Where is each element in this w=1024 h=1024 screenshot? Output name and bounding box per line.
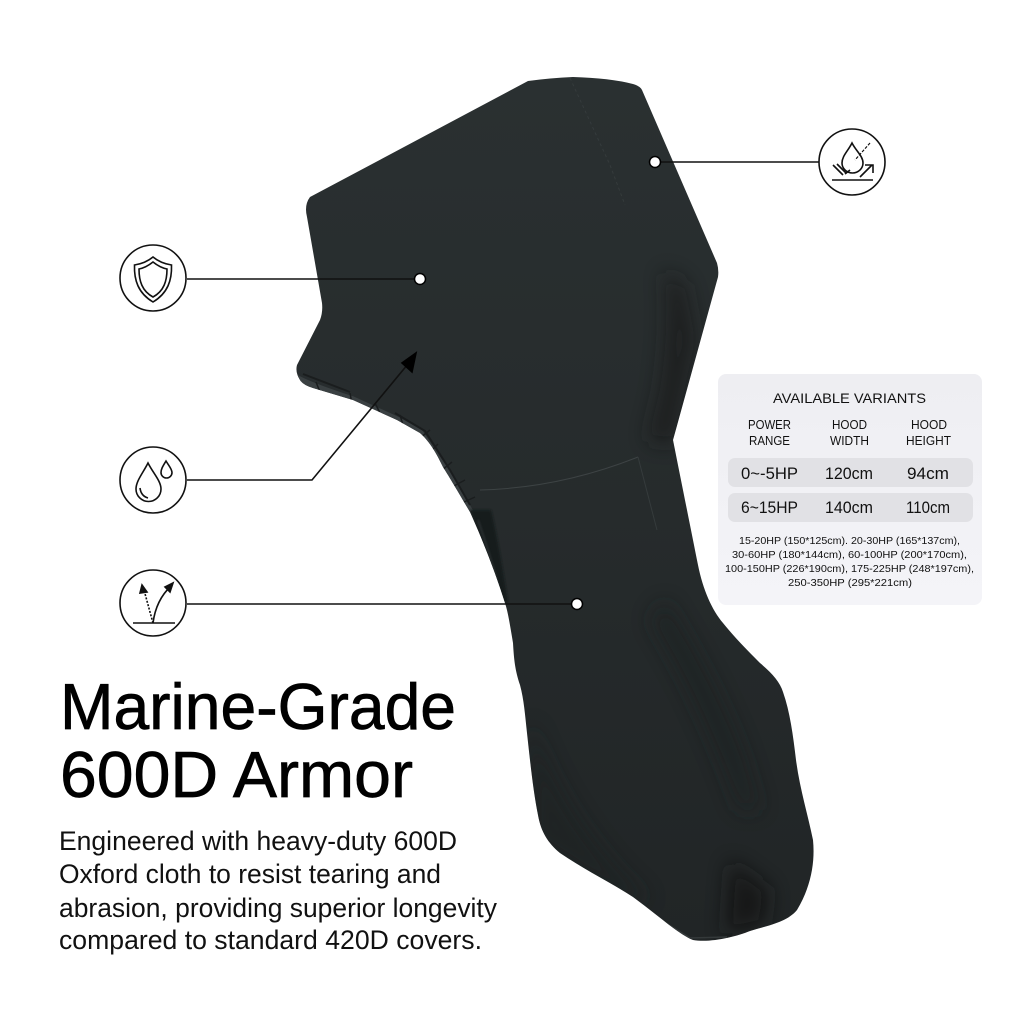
table row: 0-5HP: 0~-5HP [741, 465, 798, 483]
callout: shield [120, 245, 426, 311]
panel: available variants [718, 374, 982, 605]
callout: abrasion deflection [120, 570, 582, 636]
additional sizes note: 15-20HP (150*125cm). 20-30HP (165*137cm), [739, 535, 960, 547]
table row: 6-15HP [728, 493, 973, 522]
table column headers: HEIGHT [906, 434, 951, 448]
description text: Oxford cloth to resist tearing and [59, 859, 441, 889]
table column headers: POWER [748, 418, 791, 432]
title [60, 670, 456, 811]
table row: 6-15HP: 110cm [906, 499, 950, 517]
table row: 0-5HP: 94cm [907, 465, 949, 483]
callout: water drops with arrow [120, 353, 416, 513]
title: Marine-Grade [60, 670, 456, 743]
outboard motor cover [296, 77, 814, 941]
additional sizes note [725, 535, 974, 589]
description text [59, 826, 498, 955]
description text: abrasion, providing superior longevity [59, 893, 498, 923]
callout: waterproof coating [650, 129, 885, 195]
additional sizes note: 250-350HP (295*221cm) [788, 577, 912, 589]
table row: 0-5HP [728, 458, 973, 487]
table column headers [748, 418, 951, 448]
panel heading: AVAILABLE VARIANTS [773, 390, 926, 406]
table row: 0-5HP: 120cm [825, 465, 873, 483]
additional sizes note: 100-150HP (226*190cm), 175-225HP (248*197cm), [725, 563, 974, 575]
table column headers: WIDTH [830, 434, 869, 448]
description text: Engineered with heavy-duty 600D [59, 826, 457, 856]
table column headers: RANGE [749, 434, 790, 448]
table column headers: HOOD [911, 418, 947, 432]
table row: 6-15HP: 140cm [825, 499, 873, 517]
table row: 6-15HP: 6~15HP [741, 499, 798, 517]
description text: compared to standard 420D covers. [59, 925, 482, 955]
title: 600D Armor [60, 738, 413, 811]
table column headers: HOOD [832, 418, 867, 432]
additional sizes note: 30-60HP (180*144cm), 60-100HP (200*170cm), [732, 549, 967, 561]
